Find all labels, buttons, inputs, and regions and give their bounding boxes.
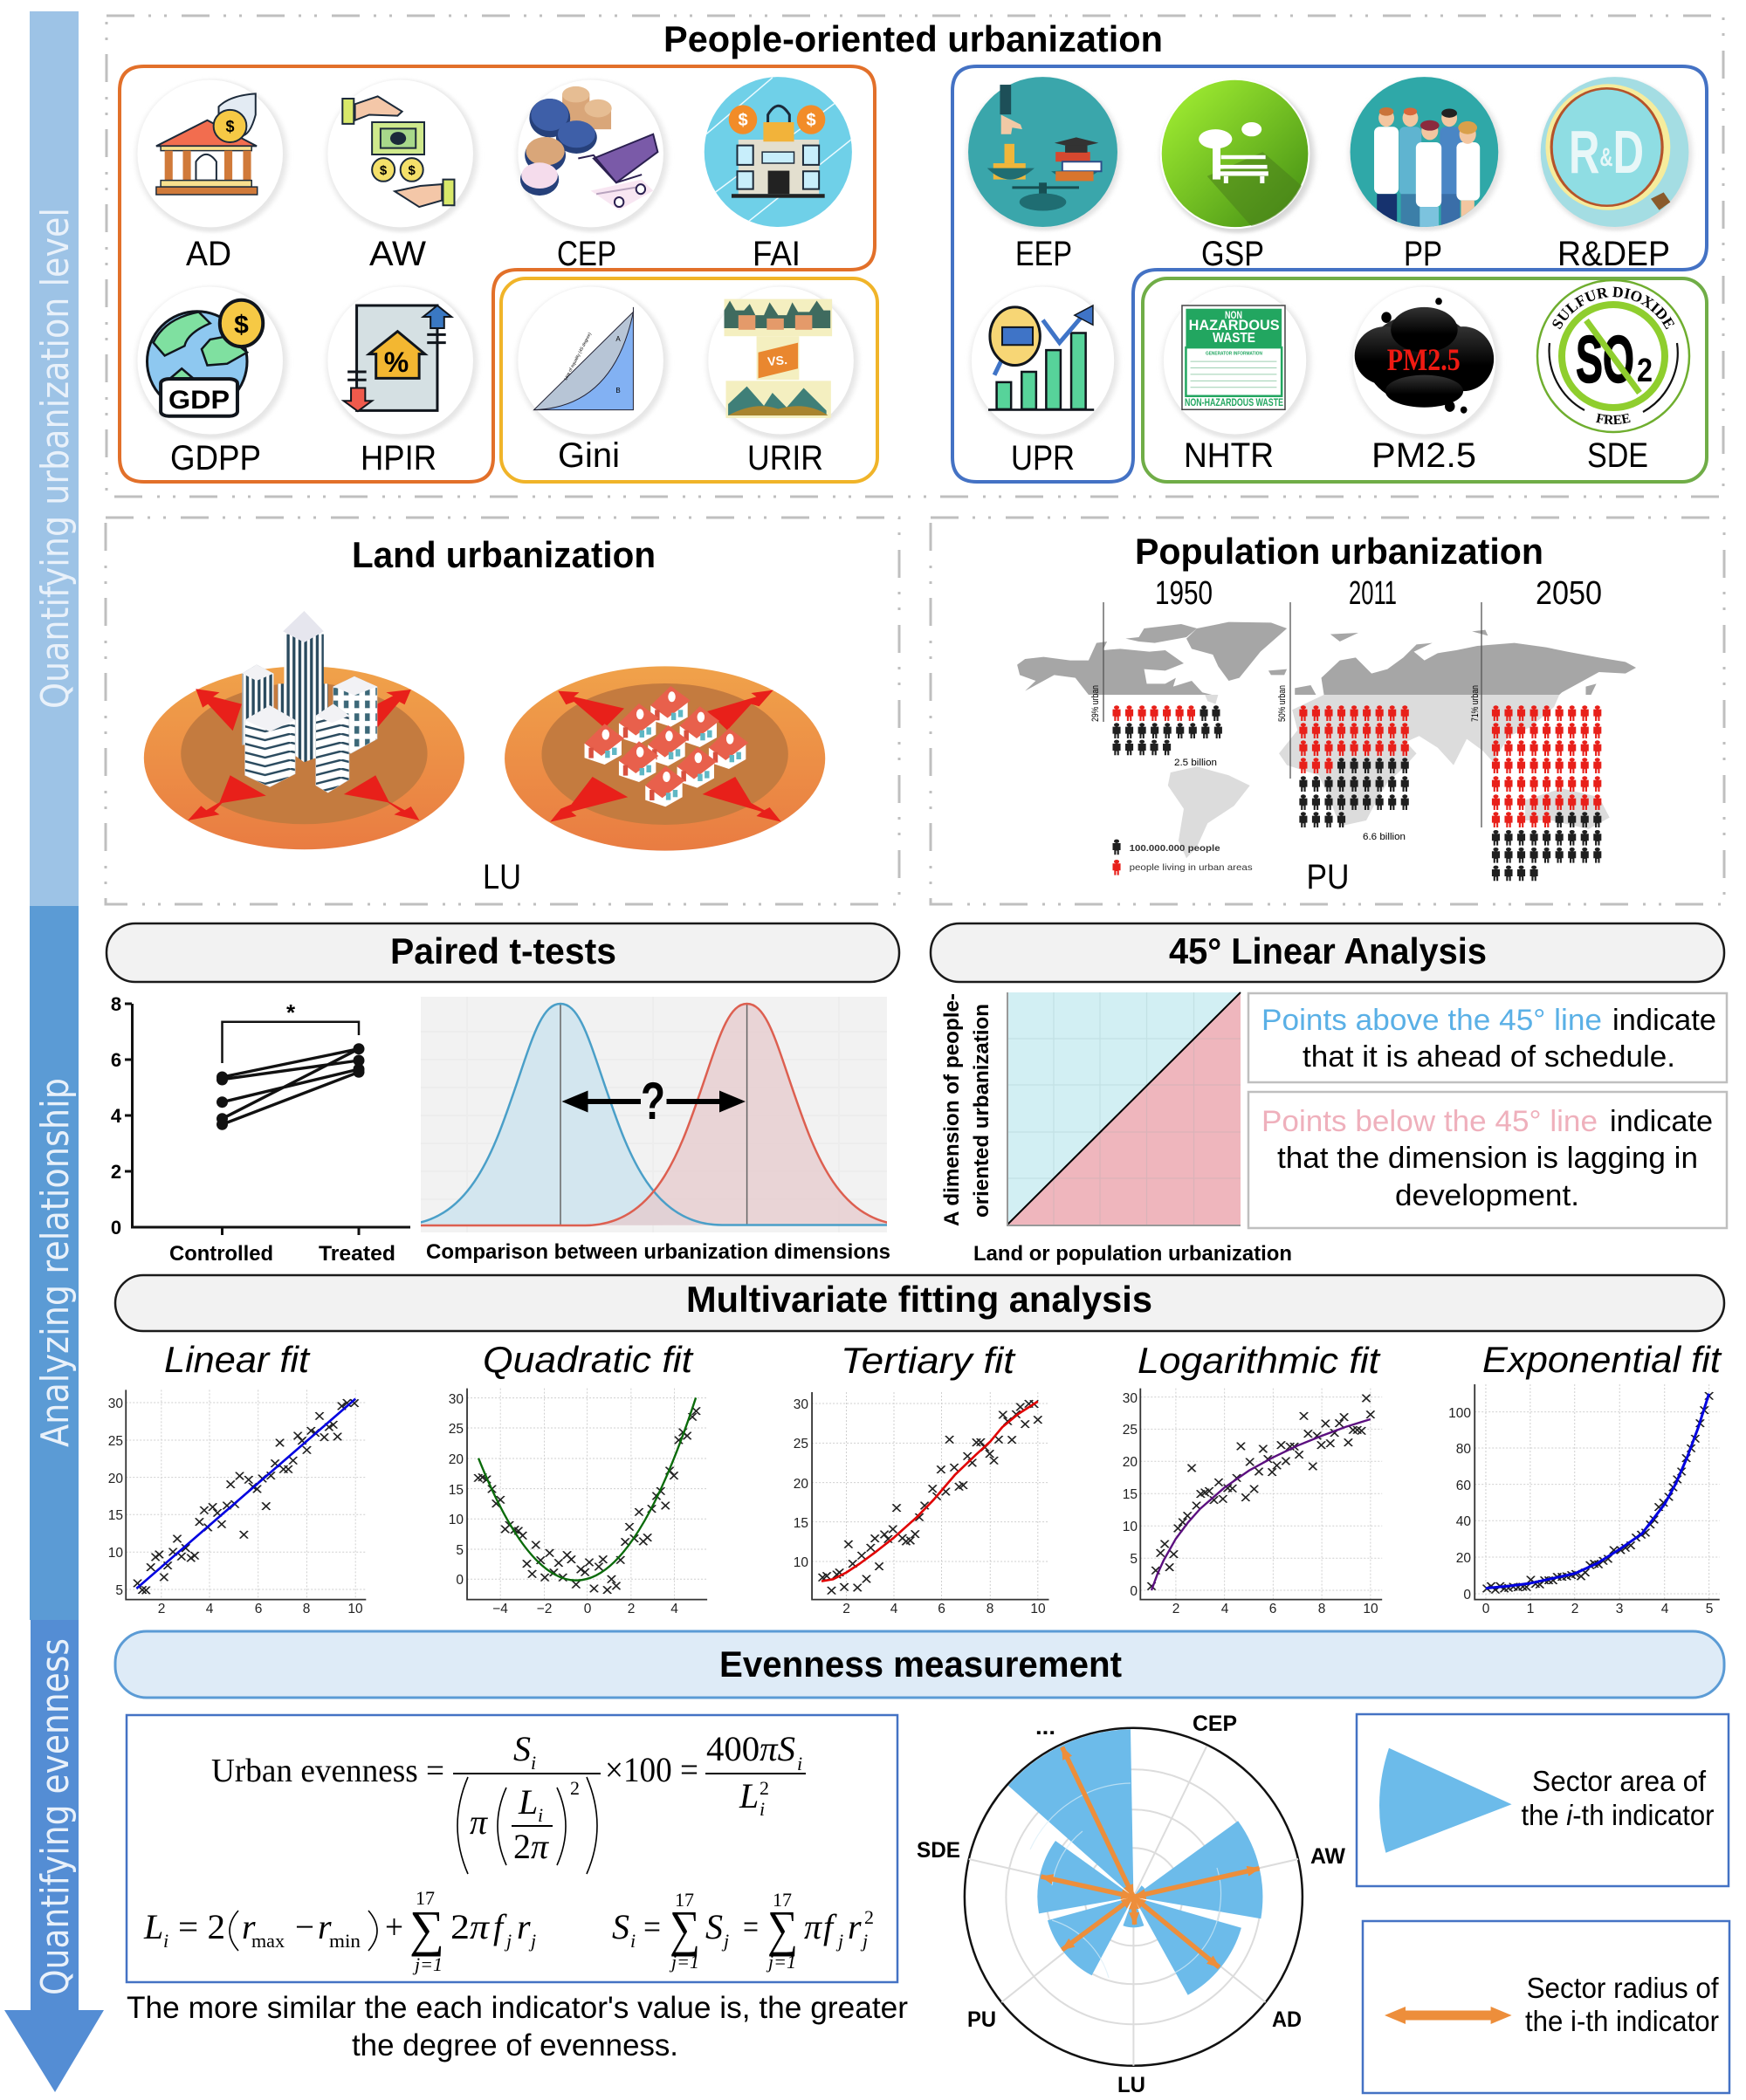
icon: URIR urban vs rural: VS. (766, 353, 788, 368)
chart: tertiary fit (794, 1392, 1049, 1616)
chart: linear fit: 4 (206, 1602, 214, 1616)
pill heading: Paired t-tests (390, 930, 616, 971)
formula: S_i: ∑ (670, 1900, 700, 1957)
formula: urban evenness: 400πS (706, 1729, 795, 1768)
fit titles: Exponential fit (1482, 1339, 1722, 1380)
chart: quadratic fit: 4 (670, 1602, 678, 1616)
icon: SDE sulfur dioxide free (1536, 279, 1690, 433)
year: 1950: 1950 (1155, 575, 1213, 612)
chart: linear fit: 6 (255, 1602, 262, 1616)
formula: L_i: j=1 (412, 1953, 443, 1975)
band: analyzing relationship (30, 906, 79, 1620)
icon: Gini Lorenz curve (517, 286, 668, 439)
label: PU: PU (1306, 858, 1350, 896)
formula: L_i: = 2 (178, 1907, 225, 1946)
formula: L_i: min (329, 1930, 361, 1952)
icon: AD bank (136, 79, 287, 232)
chart: linear fit: 20 (108, 1472, 123, 1486)
icon: NHTR waste label: NON-HAZARDOUS WASTE (1185, 396, 1283, 408)
sectors (1008, 1729, 1262, 1995)
chart: quadratic fit: −4 (492, 1602, 508, 1616)
icon: R&D magnifier: & (1599, 143, 1613, 172)
chart: linear fit: 30 (108, 1397, 123, 1411)
panel: population urbanization (931, 518, 1724, 904)
legend: sector area (1357, 1714, 1729, 1886)
label: NHTR: NHTR (1184, 436, 1274, 475)
chart: exponential fit: 5 (1706, 1602, 1713, 1616)
formula: urban evenness: S (513, 1729, 531, 1768)
year: 2011: 2011 (1349, 575, 1397, 612)
icon: Gini Lorenz curve: Line of equality (45 degree) (563, 332, 593, 381)
chart: quadratic fit (449, 1389, 707, 1616)
chart: linear fit: 10 (347, 1602, 363, 1616)
callout: below line: development. (1395, 1179, 1579, 1212)
divider lines (1103, 602, 1481, 827)
chart: linear fit: 8 (303, 1602, 310, 1616)
chart: linear fit: 25 (108, 1434, 123, 1449)
chart: quadratic fit: −2 (537, 1602, 552, 1616)
chart: exponential fit: 80 (1456, 1442, 1471, 1457)
axis labels: CEP (1193, 1712, 1237, 1736)
group outline: orange (120, 66, 875, 482)
icon: R&D magnifier: D (1613, 118, 1644, 186)
chart: tertiary fit: 10 (1030, 1602, 1046, 1616)
arrow: difference between means: ? (641, 1072, 665, 1130)
formula: urban evenness: 2 (570, 1777, 580, 1799)
pill heading: Multivariate fitting analysis (686, 1279, 1152, 1320)
urban share labels: 71% urban (1470, 685, 1481, 722)
formula: urban evenness: i (538, 1804, 543, 1826)
icon: GSP green space (1161, 79, 1318, 233)
total labels (1174, 758, 1406, 842)
chart: tertiary fit: 8 (986, 1602, 993, 1616)
icon: FAI building (705, 77, 852, 230)
icon: NHTR waste label: GENERATOR INFORMATION (1206, 352, 1262, 357)
callout: above line (1248, 993, 1727, 1082)
axis labels: PU (967, 2007, 996, 2032)
label: CEP: CEP (557, 235, 616, 273)
year: 2050: 2050 (1536, 575, 1602, 612)
fit titles: Tertiary fit (841, 1340, 1017, 1381)
label: HPIR: HPIR (361, 439, 436, 477)
legend: people living in urban areas (1130, 862, 1253, 873)
chart: exponential fit: 4 (1661, 1602, 1669, 1616)
icon: AW money exchange: $ (380, 163, 388, 178)
formula: urban evenness: ×100 = (605, 1750, 698, 1789)
formula: L_i: max (251, 1930, 285, 1952)
icon: AW money exchange (327, 79, 478, 232)
formula: S_i: j (721, 1930, 729, 1952)
pill heading (931, 923, 1724, 982)
illustration: city expansion (144, 611, 464, 849)
chart: paired dots (111, 993, 410, 1266)
formula: L_i (143, 1887, 536, 1975)
formula: L_i: r (517, 1907, 531, 1946)
formula: S_i: 17 (675, 1889, 694, 1911)
axis labels: SDE (917, 1838, 960, 1863)
formula: L_i: j (528, 1930, 536, 1952)
formula: L_i: + (385, 1907, 403, 1946)
formula: L_i: r (318, 1907, 332, 1946)
label: LU: LU (483, 858, 521, 896)
formula: S_i: π (804, 1907, 822, 1946)
callout: above line: Points above the 45° line (1261, 1004, 1602, 1037)
chart: paired dots: 8 (111, 993, 121, 1015)
icon: SDE sulfur dioxide free: 2 (1637, 353, 1653, 389)
chart: exponential fit: 100 (1448, 1406, 1471, 1421)
icon: NHTR waste label: WASTE (1213, 331, 1255, 346)
label: EEP: EEP (1015, 235, 1072, 273)
chart: 45 degree square (1007, 992, 1241, 1225)
caption: The more similar the each indicator's value is, the greater (127, 1991, 908, 2025)
formula: L_i: ∑ (409, 1900, 444, 1957)
formula: urban evenness: 2π (513, 1827, 549, 1866)
formula: L_i: 17 (416, 1887, 435, 1909)
chart: tertiary fit: 30 (794, 1397, 808, 1412)
chart: logarithmic fit: 0 (1130, 1584, 1138, 1599)
icon: HPIR house price: % (384, 347, 409, 378)
chart: linear fit: 2 (158, 1602, 165, 1616)
icon: SDE sulfur dioxide free: FREE (1596, 414, 1631, 424)
chart: logarithmic fit: 5 (1130, 1552, 1138, 1567)
chart: logarithmic fit: 2 (1172, 1602, 1179, 1616)
formula: L_i: 2π (450, 1907, 490, 1946)
icon: Gini Lorenz curve: B (615, 387, 621, 395)
chart: quadratic fit: 0 (456, 1573, 464, 1588)
chart: paired dots: 0 (111, 1217, 121, 1239)
formula: S_i: 2 (864, 1906, 874, 1928)
total labels: 2.5 billion (1174, 758, 1217, 768)
pill heading: 45° Linear Analysis (1169, 930, 1487, 971)
icon: URIR urban vs rural (707, 286, 858, 439)
urban share labels (1090, 685, 1481, 722)
icon: double arrow (1385, 2007, 1512, 2024)
icon: SDE sulfur dioxide free: SO (1576, 323, 1634, 397)
icon: EEP education scale (967, 77, 1121, 230)
formula box (127, 1715, 897, 1982)
label: AD: AD (186, 235, 231, 273)
band label: Quantifying urbanization level (33, 208, 78, 709)
icon: AD bank: $ (225, 118, 235, 135)
pill heading (107, 923, 899, 982)
section: multivariate fitting analysis (108, 1275, 1724, 1616)
chart: quadratic fit: 30 (449, 1392, 464, 1407)
fit titles (164, 1339, 1722, 1381)
icon: sector (1379, 1748, 1512, 1853)
pill heading (115, 1275, 1724, 1331)
fit titles: Quadratic fit (483, 1339, 694, 1380)
chart: paired dots: 2 (111, 1161, 121, 1183)
formula: S_i: f (823, 1907, 837, 1946)
chart: tertiary fit: 4 (890, 1602, 898, 1616)
formula: S_i: ∑ (767, 1900, 798, 1957)
urban share labels: 29% urban (1090, 685, 1101, 722)
legend text: the i-th indicator (1521, 1799, 1715, 1831)
chart: exponential fit: 1 (1527, 1602, 1534, 1616)
chart: logarithmic fit: 20 (1123, 1455, 1138, 1470)
chart: quadratic fit: 25 (449, 1422, 464, 1437)
arrow label: Quantifying evenness (33, 1638, 78, 1995)
pill heading: Evenness measurement (719, 1644, 1122, 1685)
chart: linear fit: 15 (108, 1508, 123, 1523)
icon: R&D magnifier (1541, 77, 1692, 230)
chart: logarithmic fit: 10 (1123, 1520, 1138, 1534)
section: evenness measurement (115, 1631, 1729, 2097)
pill heading (115, 1631, 1724, 1698)
legend text (1521, 1765, 1715, 1831)
radius arrows (1041, 1747, 1260, 1967)
icon: AW money exchange: $ (409, 163, 416, 178)
chart: quadratic fit: 2 (628, 1602, 635, 1616)
axis labels: AW (1310, 1844, 1345, 1869)
chart: paired dots: 4 (111, 1105, 122, 1127)
formula: urban evenness (211, 1729, 806, 1874)
formula: S_i: j (835, 1930, 843, 1952)
axis label: x: Land or population urbanization (973, 1242, 1292, 1266)
formula: urban evenness: π (470, 1802, 488, 1842)
formula: urban evenness: Urban evenness = (211, 1753, 444, 1789)
formula: urban evenness: L (518, 1782, 538, 1822)
formula: S_i: j=1 (669, 1951, 699, 1973)
chart: quadratic fit: 15 (449, 1483, 464, 1498)
chart: tertiary fit: 15 (794, 1516, 808, 1531)
chart: polar evenness rose (917, 1712, 1345, 2097)
formula: S_i: = (643, 1907, 661, 1946)
callout: below line: indicate (1610, 1105, 1713, 1138)
legend text: the i-th indicator (1525, 2005, 1719, 2037)
chart: tertiary fit: 25 (794, 1437, 808, 1451)
heading: People-oriented urbanization (663, 18, 1163, 59)
label: Gini: Gini (558, 436, 620, 475)
chart: logarithmic fit: 25 (1123, 1423, 1138, 1438)
icon: CEP coins and cart (517, 79, 668, 232)
group outline: green (1143, 278, 1707, 482)
chart: linear fit: 10 (108, 1546, 123, 1561)
chart: paired dots: * (286, 999, 296, 1026)
callout: below line: Points below the 45° line (1261, 1105, 1598, 1138)
section: 45 degree linear analysis (931, 923, 1727, 1266)
chart: tertiary fit: 2 (842, 1602, 850, 1616)
legend text (1525, 1972, 1719, 2037)
chart: logarithmic fit: 10 (1363, 1602, 1378, 1616)
icon: GDPP globe (136, 286, 287, 439)
arrow: difference between means (562, 1072, 746, 1130)
formula: urban evenness: L (739, 1776, 759, 1815)
formula: S_i: r (848, 1907, 862, 1946)
formula: L_i: r (242, 1907, 256, 1946)
chart: logarithmic fit: 6 (1269, 1602, 1276, 1616)
legend: 100.000.000 people (1130, 843, 1220, 854)
label: GSP: GSP (1201, 235, 1264, 273)
heading: Population urbanization (1135, 531, 1543, 572)
band: quantifying urbanization level (30, 11, 79, 906)
formula: S_i: j (860, 1930, 868, 1952)
formula: S_i (612, 1889, 874, 1973)
formula: S_i: i (630, 1930, 636, 1952)
chart: paired dots: Controlled (169, 1242, 273, 1266)
axis label: y (940, 993, 993, 1226)
panel: people-oriented urbanization (105, 14, 1725, 498)
axis labels (917, 1712, 1345, 2097)
chart: quadratic fit: 5 (456, 1543, 464, 1558)
label: AW: AW (369, 235, 426, 273)
label: FAI: FAI (753, 235, 801, 273)
formula: S_i: = (743, 1907, 759, 1946)
group outline: yellow (501, 278, 877, 482)
chart: exponential fit: 3 (1616, 1602, 1623, 1616)
legend text: Sector radius of (1527, 1972, 1719, 2004)
fit titles: Logarithmic fit (1138, 1340, 1381, 1381)
icon: NHTR waste label: HAZARDOUS (1189, 317, 1280, 333)
fit titles: Linear fit (164, 1339, 311, 1380)
formula: L_i: − (295, 1907, 314, 1946)
arrow: quantifying evenness (4, 1620, 104, 2092)
chart: paired dots: Treated (319, 1242, 395, 1266)
axis labels: ... (1035, 1715, 1055, 1740)
label: R&DEP: R&DEP (1557, 235, 1670, 273)
formula: L_i: j (504, 1930, 512, 1952)
illustration: village expansion (505, 666, 825, 851)
callout: below line (1248, 1092, 1727, 1228)
chart: tertiary fit: 6 (938, 1602, 945, 1616)
icon: SDE sulfur dioxide free: SULFUR DIOXIDE (1552, 286, 1674, 330)
callout: below line: that the dimension is lagging in (1277, 1142, 1698, 1175)
chart: exponential fit: 0 (1463, 1588, 1471, 1602)
caption (127, 1991, 908, 2062)
chart: logarithmic fit: 15 (1123, 1487, 1138, 1502)
chart: logarithmic fit (1123, 1389, 1382, 1616)
axis label: y: A dimension of people- (940, 993, 964, 1226)
formula: L_i: L (143, 1907, 163, 1946)
formula: urban evenness: i (531, 1752, 536, 1774)
legend: sector radius (1363, 1921, 1729, 2093)
icon: GDPP globe: GDP (168, 386, 230, 415)
axis labels: LU (1117, 2073, 1145, 2097)
chart: overlapping normal distributions (399, 997, 909, 1264)
chart: exponential fit: 60 (1456, 1479, 1471, 1493)
chart: linear fit (108, 1390, 366, 1616)
urban share labels: 50% urban (1277, 685, 1288, 722)
world map (1017, 622, 1636, 858)
chart: overlapping normal distributions: Comparison between urbanization dimensions (426, 1240, 890, 1264)
chart: linear fit: 5 (115, 1583, 123, 1598)
label: PM2.5: PM2.5 (1371, 436, 1476, 475)
axis labels: AD (1272, 2007, 1302, 2032)
formula: urban evenness: 2 (760, 1777, 769, 1799)
caption: the degree of evenness. (352, 2028, 678, 2062)
icon: GDPP globe: $ (234, 311, 249, 340)
axis label: y: oriented urbanization (970, 1004, 993, 1218)
formula: S_i: S (705, 1907, 723, 1946)
icon: HPIR house price (327, 286, 478, 439)
chart: quadratic fit: 20 (449, 1452, 464, 1467)
label: SDE: SDE (1587, 436, 1648, 475)
icon: FAI building: $ (806, 111, 816, 130)
chart: logarithmic fit: 30 (1123, 1391, 1138, 1406)
label: GDPP: GDPP (170, 439, 261, 477)
icon: Gini Lorenz curve: A (615, 335, 621, 343)
icon: FAI building: $ (738, 111, 748, 130)
chart: quadratic fit: 0 (584, 1602, 592, 1616)
formula: L_i: f (493, 1907, 507, 1946)
chart: exponential fit (1448, 1384, 1720, 1616)
formula: urban evenness: i (760, 1798, 765, 1820)
formula: L_i: i (163, 1930, 168, 1952)
pictogram: people figures (1112, 705, 1601, 881)
chart: logarithmic fit: 8 (1318, 1602, 1325, 1616)
band label: Analyzing relationship (33, 1078, 78, 1447)
icon: R&D magnifier: R (1569, 118, 1613, 186)
chart: logarithmic fit: 4 (1221, 1602, 1229, 1616)
icon: NHTR waste label (1163, 286, 1310, 439)
icon: PM2.5 cloud: PM2.5 (1387, 342, 1461, 377)
icon: PP physicians (1349, 77, 1502, 230)
legend text: Sector area of (1532, 1765, 1707, 1797)
label: UPR: UPR (1011, 439, 1075, 477)
section: paired t-tests (107, 923, 909, 1266)
legend (1130, 843, 1253, 873)
chart: quadratic fit: 10 (449, 1513, 464, 1527)
chart: tertiary fit: 20 (794, 1477, 808, 1492)
chart: tertiary fit: 10 (794, 1555, 808, 1570)
chart: exponential fit: 2 (1571, 1602, 1578, 1616)
callout: above line: indicate (1612, 1004, 1716, 1037)
callout: above line: that it is ahead of schedule. (1303, 1040, 1675, 1074)
formula: S_i: 17 (773, 1889, 792, 1911)
formula: S_i: j=1 (766, 1951, 796, 1973)
formula: S_i: S (612, 1907, 629, 1946)
label: URIR: URIR (747, 439, 823, 477)
total labels: 6.6 billion (1363, 832, 1406, 842)
group outline: blue (952, 66, 1707, 482)
chart: paired dots: 6 (111, 1049, 121, 1071)
icon: PM2.5 cloud (1352, 286, 1500, 439)
label: PP: PP (1404, 235, 1442, 273)
formula: urban evenness: i (797, 1753, 802, 1774)
icon: UPR growth chart (971, 286, 1118, 439)
panel: land urbanization (106, 518, 899, 904)
chart: exponential fit: 20 (1456, 1551, 1471, 1566)
heading: Land urbanization (352, 534, 656, 575)
icon: NHTR waste label: NON (1225, 309, 1242, 321)
chart: exponential fit: 40 (1456, 1514, 1471, 1529)
chart: exponential fit: 0 (1482, 1602, 1490, 1616)
